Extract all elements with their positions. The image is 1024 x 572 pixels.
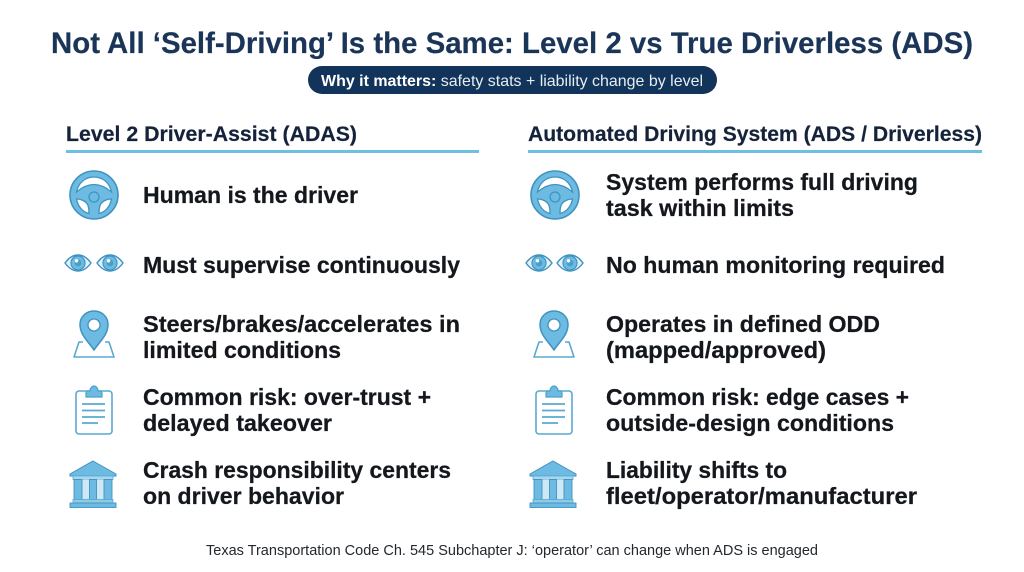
row: edge cases — [536, 384, 909, 436]
row: no human monitoring: No human monitoring required — [606, 252, 945, 278]
row: crash responsibility — [70, 457, 451, 509]
subtitle pill: Why it matters: safety stats + liability change by level — [321, 73, 703, 90]
row: limited conditions: Steers/brakes/accelerates in — [143, 311, 460, 337]
row: system performs full driving task — [531, 169, 918, 221]
row: edge cases: outside-design conditions — [606, 410, 894, 436]
row: limited conditions — [74, 311, 460, 363]
subtitle pill — [308, 66, 717, 94]
panel: Level 2 Driver-Assist — [65, 122, 479, 509]
row: liability shifts: Liability shifts to — [606, 457, 787, 483]
row: liability shifts: fleet/operator/manufacturer — [606, 483, 917, 509]
row: crash responsibility: Crash responsibility centers — [143, 457, 451, 483]
row: system performs full driving task: System performs full driving — [606, 169, 918, 195]
title: Not All ‘Self-Driving’ Is the Same: Level 2 vs True Driverless (ADS) — [51, 27, 973, 60]
row: edge cases: Common risk: edge cases + — [606, 384, 909, 410]
row: defined ODD: Operates in defined ODD — [606, 311, 880, 337]
row: defined ODD — [534, 311, 880, 363]
footer source note: Texas Transportation Code Ch. 545 Subchapter J: ‘operator’ can change when ADS is engaged — [206, 543, 818, 559]
row: crash responsibility: on driver behavior — [143, 483, 344, 509]
row: common risk — [76, 384, 431, 436]
row: common risk: delayed takeover — [143, 410, 332, 436]
row: limited conditions: limited conditions — [143, 337, 341, 363]
row: defined ODD: (mapped/approved) — [606, 337, 826, 363]
row: human is the driver: Human is the driver — [143, 182, 358, 208]
panel: Automated Driving System — [526, 122, 982, 509]
row: liability shifts — [530, 457, 917, 509]
row: system performs full driving task: task within limits — [606, 195, 794, 221]
row: human is the driver — [70, 171, 358, 219]
row: common risk: Common risk: over-trust + — [143, 384, 431, 410]
heading: ADS: Automated Driving System (ADS / Driverless) — [528, 122, 982, 146]
row: must supervise: Must supervise continuously — [143, 252, 460, 278]
heading: Level 2: Level 2 Driver-Assist (ADAS) — [66, 122, 357, 146]
